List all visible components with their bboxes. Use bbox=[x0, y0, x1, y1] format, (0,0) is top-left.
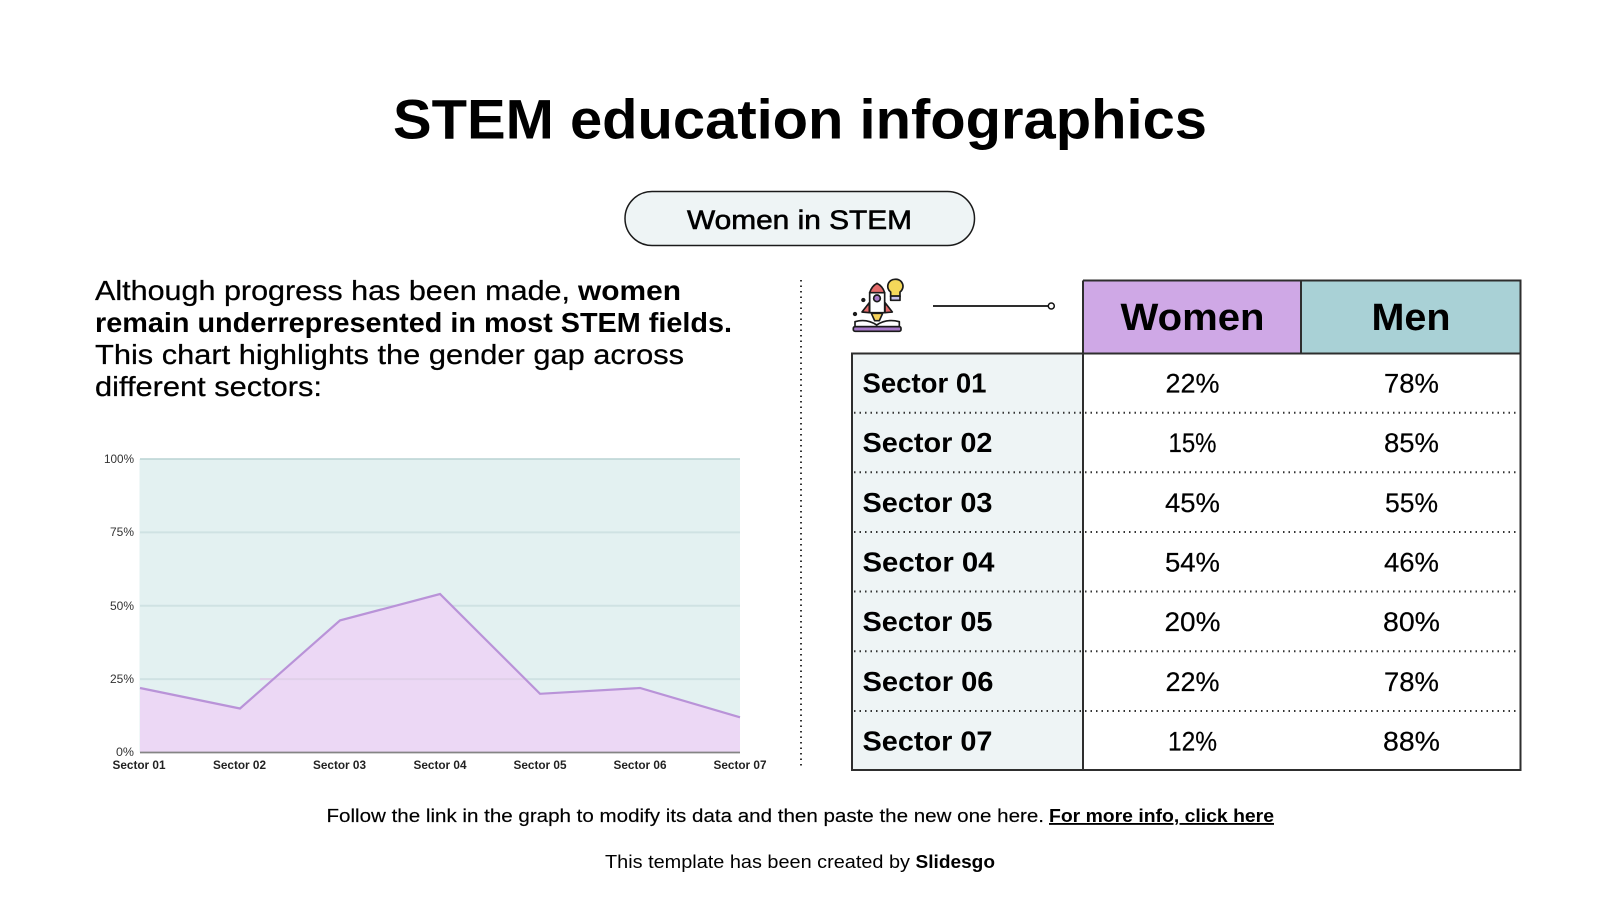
row: Sector 06: 22% bbox=[1166, 667, 1220, 697]
intro paragraph: Although progress has been made, bbox=[95, 275, 570, 306]
x axis labels bbox=[112, 760, 766, 772]
line: women bbox=[140, 594, 740, 717]
x axis labels: Sector 07 bbox=[714, 760, 766, 772]
row: Sector 07: 88% bbox=[1383, 726, 1440, 756]
row: Sector 02: 85% bbox=[1384, 428, 1439, 458]
pill heading: Women in STEM: Women in STEM bbox=[687, 205, 912, 235]
header cell: Men bbox=[1301, 280, 1521, 354]
row: Sector 06: 78% bbox=[1384, 667, 1439, 697]
table borders bbox=[852, 280, 1520, 770]
table: women vs men by sector bbox=[852, 280, 1524, 770]
row: Sector 04 bbox=[862, 546, 1439, 578]
row: Sector 01: Sector 01 bbox=[862, 368, 986, 398]
title: STEM education infographics bbox=[393, 88, 1207, 150]
row: Sector 05: 20% bbox=[1164, 607, 1220, 637]
footer note with link bbox=[326, 805, 1274, 826]
intro paragraph bbox=[95, 275, 732, 402]
y axis labels bbox=[104, 454, 134, 759]
dotted row separators bbox=[854, 413, 1524, 711]
row: Sector 04: Sector 04 bbox=[862, 546, 995, 578]
area chart: women share by sector bbox=[104, 454, 766, 772]
x axis labels: Sector 04 bbox=[414, 760, 467, 772]
row: Sector 07: Sector 07 bbox=[862, 726, 992, 756]
credit line: This template has been created by bbox=[605, 851, 911, 872]
footer note with link: For more info, click here bbox=[1049, 805, 1274, 826]
y axis labels: 75% bbox=[110, 527, 134, 539]
row: Sector 02: Sector 02 bbox=[862, 427, 992, 458]
row: Sector 03: Sector 03 bbox=[862, 487, 992, 518]
intro paragraph: different sectors: bbox=[95, 371, 322, 402]
connector line with circle end bbox=[933, 303, 1054, 309]
row: Sector 01: 78% bbox=[1384, 368, 1439, 398]
row: Sector 01: 22% bbox=[1166, 368, 1220, 398]
x axis labels: Sector 05 bbox=[514, 760, 567, 772]
intro paragraph: women bbox=[577, 275, 681, 306]
row: Sector 06: Sector 06 bbox=[862, 666, 994, 697]
icon: rocket, book and light bulb bbox=[853, 279, 903, 331]
row: Sector 05: Sector 05 bbox=[862, 606, 992, 637]
intro paragraph: This chart highlights the gender gap across bbox=[95, 339, 684, 370]
row: Sector 06 bbox=[862, 666, 1439, 697]
header cell: Women bbox=[1083, 280, 1301, 354]
y axis labels: 0% bbox=[116, 747, 134, 759]
row: Sector 01 bbox=[862, 368, 1439, 398]
x axis labels: Sector 02 bbox=[213, 760, 266, 772]
header cell: Women: Women bbox=[1120, 297, 1264, 339]
row: Sector 02: 15% bbox=[1168, 428, 1216, 458]
row: Sector 05: 80% bbox=[1383, 607, 1440, 637]
row: Sector 04: 46% bbox=[1384, 548, 1439, 578]
credit line: Slidesgo bbox=[916, 851, 995, 872]
x axis labels: Sector 06 bbox=[614, 760, 666, 772]
y axis labels: 100% bbox=[104, 454, 134, 466]
row: Sector 07: 12% bbox=[1168, 726, 1217, 756]
row: Sector 03: 55% bbox=[1385, 488, 1438, 518]
row: Sector 04: 54% bbox=[1165, 548, 1220, 578]
y axis labels: 50% bbox=[110, 601, 134, 613]
x axis labels: Sector 03 bbox=[313, 760, 366, 772]
intro paragraph: remain underrepresented in most STEM fields. bbox=[95, 307, 732, 338]
x axis labels: Sector 01 bbox=[112, 760, 166, 772]
footer note with link: Follow the link in the graph to modify its data and then paste the new one here. bbox=[326, 805, 1044, 826]
row: Sector 02 bbox=[862, 427, 1439, 458]
pill heading: Women in STEM bbox=[625, 192, 974, 246]
y axis labels: 25% bbox=[110, 674, 134, 686]
area: women bbox=[140, 594, 740, 752]
row: Sector 05 bbox=[862, 606, 1440, 637]
row: Sector 03: 45% bbox=[1165, 488, 1220, 518]
row: Sector 03 bbox=[862, 487, 1438, 518]
header cell: Men: Men bbox=[1372, 297, 1450, 339]
sector label column background bbox=[852, 354, 1083, 770]
vertical dotted divider bbox=[800, 280, 802, 769]
row: Sector 07 bbox=[862, 726, 1440, 756]
